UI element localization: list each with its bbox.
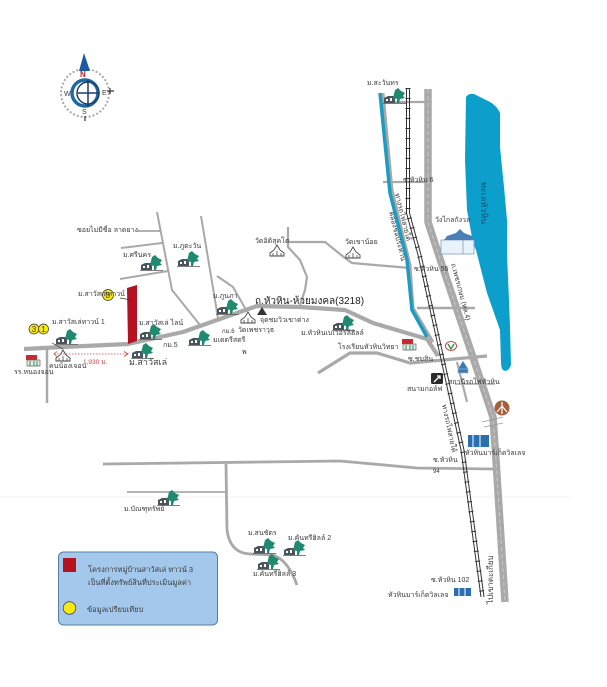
comparison markers 3 and 1: 3 <box>32 325 37 334</box>
map labels: ทางรถไฟสายใต้ <box>440 404 459 454</box>
legend panel: โครงการหมู่บ้านสาวัสเล่ ทาวน์ 3 <box>88 565 193 574</box>
legend panel: ข้อมูลเปรียบเทียบ <box>87 605 144 614</box>
map labels: กม.6 <box>222 329 235 335</box>
railway station icon <box>458 361 468 373</box>
map labels: ม.ภูตะวัน <box>173 242 201 250</box>
map labels: ม.ศรีนคร <box>123 251 151 259</box>
map labels: หัวหินมาร์เก็ตวิลเลจ <box>465 448 525 457</box>
map labels: วัดเขาน้อย <box>345 238 378 246</box>
comparison marker 3 <box>102 290 114 300</box>
compass: W <box>64 91 71 98</box>
market icons <box>454 435 489 596</box>
map labels: ซ.หัวหิน 6 <box>403 176 434 184</box>
map labels: คนน้องเจอน <box>49 362 87 370</box>
railway <box>406 88 484 597</box>
map labels <box>14 79 525 605</box>
map labels: ม.สาวัสเล่ ไลน์ <box>139 318 183 327</box>
map labels: พ <box>242 349 247 356</box>
map labels: หัวหินมาร์เก็ตวิลเลจ <box>388 590 448 599</box>
distance arrow: 1,930 ม. <box>83 359 107 366</box>
map labels: รร.หนองจอน <box>14 369 54 376</box>
palace building <box>441 229 474 254</box>
map labels: ม.คันทรีฮิลล์ 3 <box>253 570 296 578</box>
map labels: ม.สาวัสเล่ <box>129 357 167 367</box>
leader lines <box>52 231 160 349</box>
map labels: ซ.หัวหิน 56 <box>414 265 448 273</box>
map labels: สนามกอล์ฟ <box>407 385 442 393</box>
map labels: สถานีรถไฟหัวหิน <box>448 377 500 386</box>
compass: E <box>102 90 107 97</box>
map labels: ม.สาวัสเล่ทาวน์ 1 <box>52 318 105 326</box>
map labels: 94 <box>433 469 440 475</box>
compass <box>61 53 114 121</box>
map labels: ม.สาวัสเล่ทาวน์ <box>78 290 125 298</box>
legend panel: เป็นที่ตั้งทรัพย์สินที่ประเมินมูลค่า <box>88 577 191 587</box>
school icons <box>26 339 416 366</box>
canal <box>380 93 427 337</box>
map labels: ไปเขาตะเกียบ <box>486 555 495 605</box>
village icons <box>55 88 406 570</box>
map labels: วัดเพชราวุธ <box>238 326 274 334</box>
mountain marker <box>257 307 267 315</box>
compass: N <box>80 70 86 79</box>
map labels: กม.5 <box>163 342 178 349</box>
road title: ถ.หัวหิน-ห้วยมงคล(3218) <box>255 295 364 307</box>
comparison markers 3 and 1 <box>29 324 48 334</box>
map labels: ซ.ชมสิน <box>408 355 433 363</box>
map labels: วังไกลกังวล <box>435 215 470 224</box>
map labels: คลองชลประทาน <box>387 211 406 262</box>
comparison marker 3: 3 <box>106 291 110 300</box>
map labels: ม.หัวหินเบเวอร์ลีฮิลล์ <box>301 329 364 337</box>
comparison markers 3 and 1: 1 <box>41 325 46 334</box>
university logo <box>494 400 510 416</box>
map labels: ม.คันทรีฮิลล์ 2 <box>288 534 331 542</box>
main highway Phetkasem <box>428 89 505 602</box>
golf course icon <box>431 373 443 384</box>
lake: ทะเลหัวหิน <box>479 182 489 224</box>
map labels: ซ.หัวหิน <box>433 456 458 464</box>
project site: red plot <box>127 285 137 344</box>
map labels: ม.สนชัตร <box>248 529 277 537</box>
map labels: ทางรถไฟสายใต้ <box>393 192 414 242</box>
map labels: มเตตรีสตรี <box>213 336 246 344</box>
bank logo <box>446 342 456 350</box>
map labels: ม.ภูนภา <box>213 293 238 300</box>
distance arrow <box>54 352 128 366</box>
map labels: ซ.หัวหิน 102 <box>431 576 469 584</box>
minor roads <box>24 93 503 585</box>
map labels: จุดชมวิวเขาต่าง <box>260 316 309 324</box>
map labels: ถ.เพชรเกษม (ทล.4) <box>449 263 471 321</box>
legend panel <box>58 552 218 625</box>
map labels: โรงเรียนหัวหินวิทยา <box>338 342 399 351</box>
lake <box>465 94 511 371</box>
temple icons <box>56 245 360 361</box>
map labels: ซอยไม่มีชื่อ ลาดยาง <box>77 225 138 234</box>
map labels: ม.สะวันทร <box>367 79 399 87</box>
map labels: วัดอิติสุคโต <box>255 236 290 245</box>
compass: S <box>82 109 87 116</box>
map labels: ม.บัณฑุทรัพย์ <box>124 505 164 513</box>
